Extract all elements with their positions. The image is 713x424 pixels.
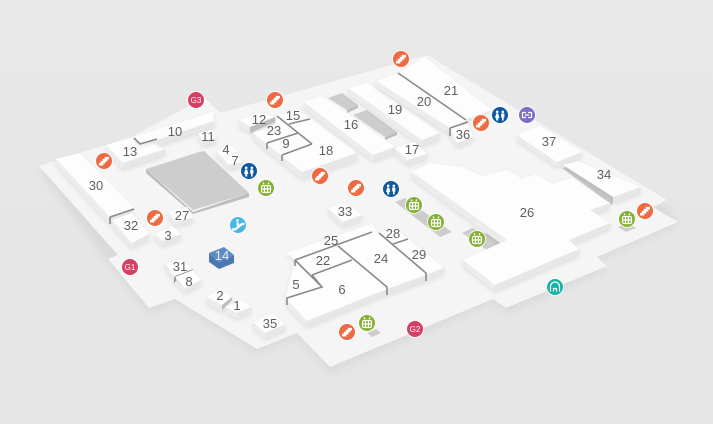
icon: elevator	[405, 196, 423, 214]
building 19: 19	[388, 102, 402, 117]
building 36	[450, 122, 473, 147]
building 16: 16	[344, 117, 358, 132]
building 31	[165, 259, 193, 283]
building 2: 2	[216, 288, 224, 303]
building 34	[563, 161, 640, 203]
building 1	[225, 298, 251, 319]
building 10: 10	[168, 124, 182, 139]
label 15: 15	[286, 108, 300, 123]
building 21	[398, 57, 492, 120]
building 14 highlighted: 14	[215, 248, 229, 263]
building 11: 11	[201, 129, 215, 144]
building 8: 8	[185, 274, 193, 289]
building 12: 12	[252, 112, 266, 127]
icon: escalator	[229, 216, 247, 234]
icon: entrance arch	[546, 278, 564, 296]
gray strip upper	[395, 198, 452, 237]
building 12	[239, 112, 275, 133]
icon: elevator	[358, 314, 376, 332]
building 3: 3	[164, 228, 172, 243]
main block	[286, 224, 444, 327]
label 9: 9	[282, 136, 290, 151]
building 17: 17	[405, 142, 419, 157]
building 11	[198, 129, 216, 146]
label 28: 28	[386, 226, 400, 241]
building 17	[395, 142, 427, 165]
icon: gate G2	[406, 320, 424, 338]
icon: gate G2: G2	[410, 325, 421, 334]
icon: restroom	[382, 180, 400, 198]
gray void lower	[353, 110, 397, 140]
building 7: 7	[231, 153, 239, 168]
building 4: 4	[222, 142, 230, 157]
building 14 highlighted	[209, 247, 234, 269]
building 30	[56, 153, 134, 225]
elevator landing 2	[618, 223, 636, 232]
building 26: 26	[520, 205, 534, 220]
icon: gate G3	[187, 91, 205, 109]
building 19	[348, 83, 440, 146]
building 36: 36	[456, 127, 470, 142]
block 15 23 9 18	[253, 108, 357, 179]
building 32	[112, 213, 149, 248]
building 35: 35	[263, 316, 277, 331]
building 34: 34	[597, 167, 611, 182]
building 1: 1	[233, 298, 241, 313]
building 33: 33	[338, 204, 352, 219]
icon: restroom	[240, 162, 258, 180]
building 21: 21	[444, 83, 458, 98]
building 13	[106, 137, 165, 169]
icon: stairs	[146, 209, 164, 227]
icon: elevator	[468, 230, 486, 248]
gray void upper	[328, 93, 358, 113]
label 23: 23	[267, 123, 281, 138]
label 24: 24	[374, 251, 388, 266]
label 22: 22	[316, 253, 330, 268]
icon: restroom	[491, 106, 509, 124]
building 3	[155, 226, 181, 246]
building 32: 32	[124, 218, 138, 233]
building 27: 27	[175, 208, 189, 223]
building 2	[207, 288, 232, 312]
icon: stairs	[311, 167, 329, 185]
building 8	[175, 270, 201, 293]
building 27	[168, 207, 193, 226]
icon: gate G1: G1	[125, 263, 136, 272]
building 37: 37	[542, 134, 556, 149]
building 35	[253, 313, 285, 339]
icon: gate G1	[121, 258, 139, 276]
building 31: 31	[173, 259, 187, 274]
label 29: 29	[412, 247, 426, 262]
icon: stairs	[347, 179, 365, 197]
building 26	[412, 163, 610, 291]
icon: elevator	[618, 210, 636, 228]
building 30: 30	[89, 178, 103, 193]
building 13: 13	[123, 144, 137, 159]
icon: stairs	[472, 114, 490, 132]
icon: stairs	[392, 50, 410, 68]
void strip near 34	[562, 166, 616, 205]
icon: elevator	[427, 213, 445, 231]
label 5: 5	[292, 277, 300, 292]
icon: stairs	[636, 202, 654, 220]
elevator landing 1	[367, 329, 381, 337]
atrium void	[146, 151, 249, 214]
building 4	[216, 142, 238, 163]
building 16	[304, 96, 395, 161]
building 20: 20	[417, 94, 431, 109]
building 33	[328, 203, 362, 227]
floor shadow	[39, 170, 678, 373]
label 6: 6	[338, 282, 346, 297]
label 25: 25	[324, 233, 338, 248]
building 10	[133, 112, 214, 145]
icon: gate G3: G3	[191, 96, 202, 105]
building 7	[223, 153, 243, 169]
icon: stairs	[95, 152, 113, 170]
building 20	[376, 73, 468, 134]
icon: elevator	[257, 179, 275, 197]
gray strip lower	[462, 228, 507, 250]
icon: stairs	[338, 323, 356, 341]
building 37	[517, 126, 582, 167]
icon: stairs	[266, 91, 284, 109]
label 18: 18	[319, 143, 333, 158]
floor plate	[39, 55, 678, 367]
icon: link	[518, 106, 536, 124]
